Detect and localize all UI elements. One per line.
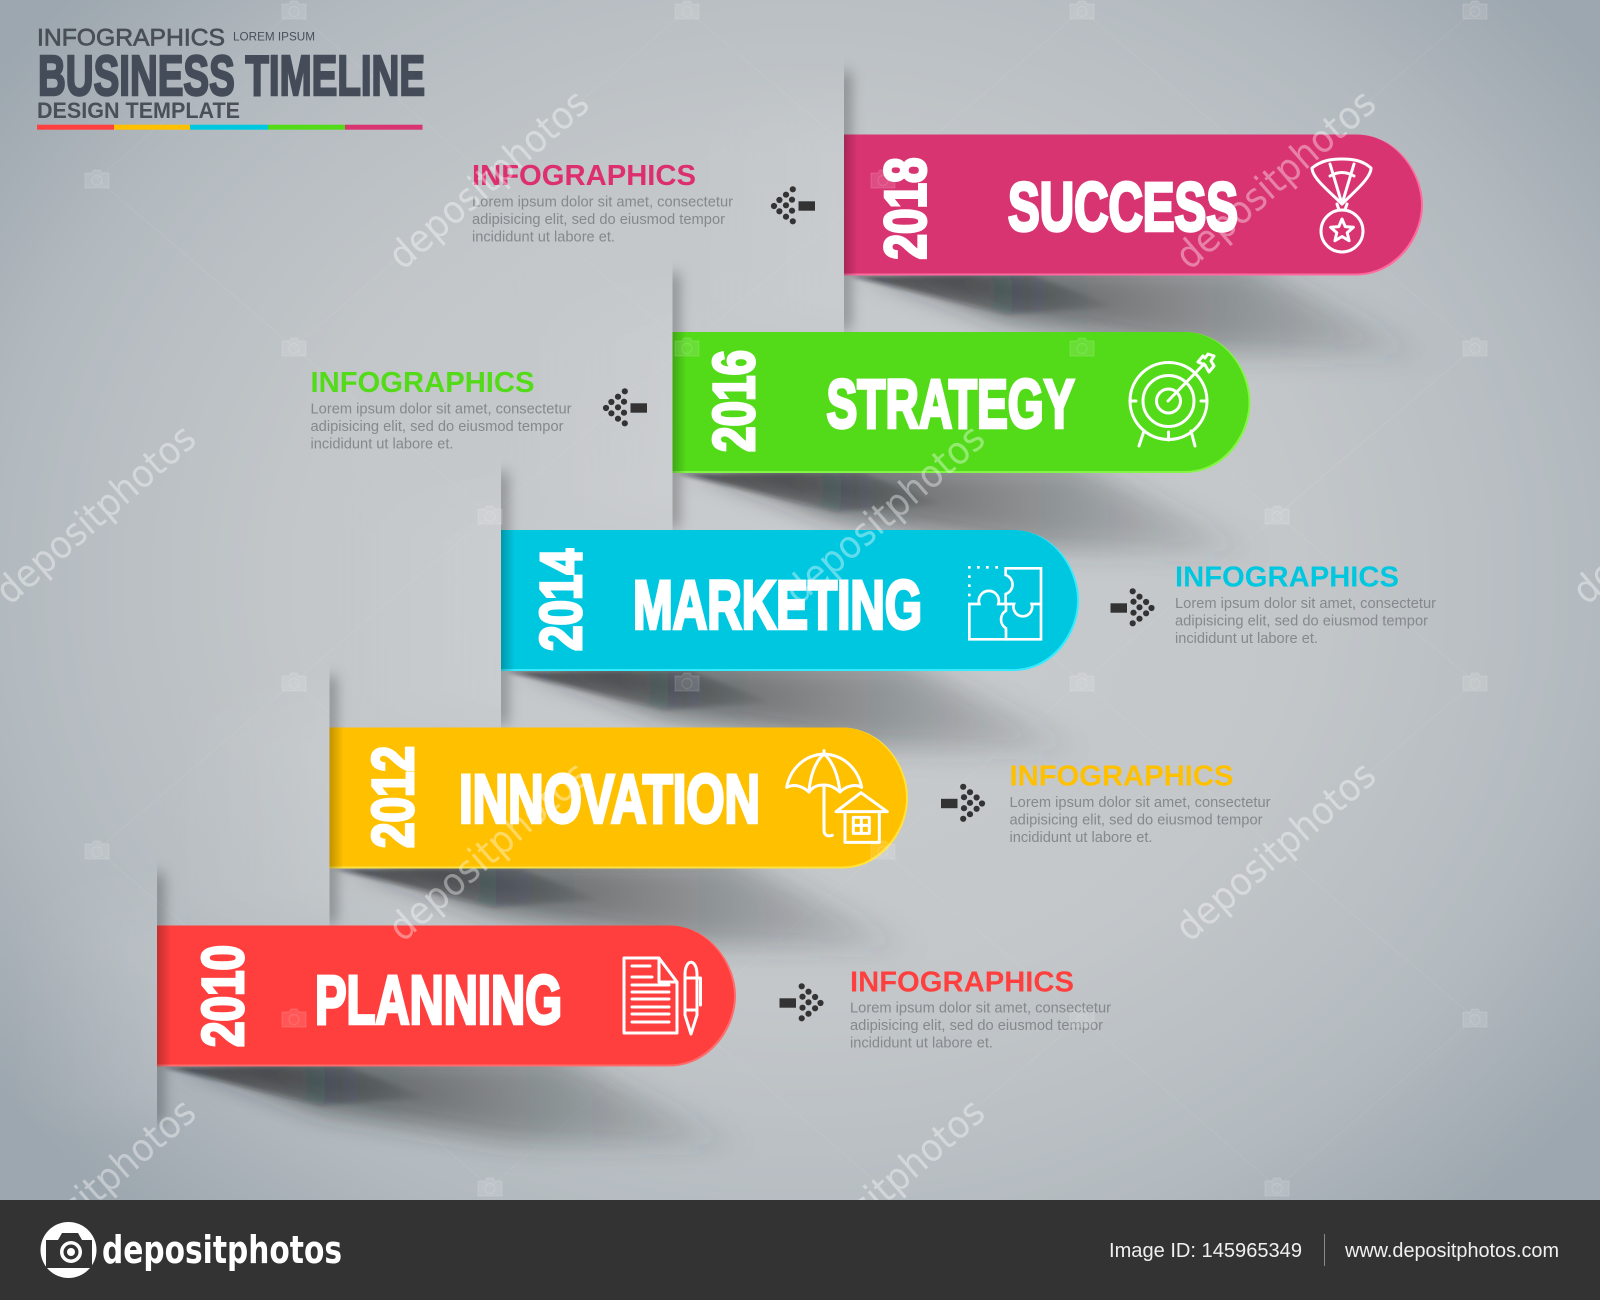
body text: Lorem ipsum dolor sit amet, consectetur [1010,795,1271,811]
title block: LOREM IPSUM [233,30,315,43]
body text: incididunt ut labore et. [472,229,615,245]
label: 2018 infographics [472,160,733,245]
label: 2016 infographics [310,367,572,452]
main heading: BUSINESS TIMELINE [38,44,425,108]
label: 2014 infographics [1175,562,1436,647]
shadow: 2010 band [162,1056,747,1148]
title block: INFOGRAPHICS [37,24,225,52]
band title: SUCCESS [1008,168,1238,246]
watermarks: depositphotos [1167,753,1384,950]
arrow: 2012 [941,784,985,822]
body text: incididunt ut labore et. [850,1035,993,1051]
body text: Lorem ipsum dolor sit amet, consectetur [1175,596,1436,612]
shadow: 2018 band [849,264,1434,356]
watermarks: depositphotos [776,416,993,613]
footer logo wordmark: depositphotos [102,1228,342,1272]
band title: INNOVATION [459,760,760,838]
icon: puzzle [968,566,1041,639]
band title: STRATEGY [826,366,1074,442]
arrow: 2018 [771,186,815,224]
shadow: 2012 band [334,858,920,950]
icon: target [1130,354,1214,446]
arrow: 2016 [603,388,647,426]
band: 2012 innovation [330,728,908,868]
body text: Lorem ipsum dolor sit amet, consectetur [472,194,733,210]
band: 2014 marketing [501,530,1079,671]
body text: adipisicing elit, sed do eiusmod tempor [472,212,725,228]
year: 2010 [191,945,256,1047]
step panel: 2010 slit [157,868,170,1128]
body text: incididunt ut labore et. [310,436,454,452]
icon: document and pen [624,958,700,1034]
body text: Lorem ipsum dolor sit amet, consectetur [850,1000,1111,1016]
label: 2010 infographics [850,966,1111,1051]
label: 2016 infographics: INFOGRAPHICS [310,367,534,399]
label: 2010 infographics: INFOGRAPHICS [850,966,1074,998]
step panel: 2012 slit [330,670,344,926]
band title: MARKETING [633,566,922,644]
year: 2016 [702,350,767,452]
body text: Lorem ipsum dolor sit amet, consectetur [310,402,572,418]
year: 2012 [361,746,426,848]
shadow: 2014 band [506,660,1091,752]
year: 2014 [529,549,594,651]
shadow: 2016 band [678,462,1262,554]
body text [1010,795,1271,846]
icon: umbrella and house [787,751,887,842]
subtitle: DESIGN TEMPLATE [37,98,240,123]
website: www.depositphotos.com [1344,1240,1559,1262]
arrow: 2010 [780,983,824,1021]
image id: Image ID: 145965349 [1109,1240,1302,1262]
body text: adipisicing elit, sed do eiusmod tempor [1010,812,1263,828]
watermarks: depositphotos [776,1090,993,1287]
body text [310,402,572,452]
label: 2018 infographics: INFOGRAPHICS [472,160,696,192]
label: 2012 infographics [1010,760,1271,846]
footer logo icon [40,1222,96,1278]
step panel: 2014 slit [501,466,515,728]
watermarks: depositphotos [380,753,597,950]
footer bar [0,1200,1600,1300]
band: 2010 planning [157,926,736,1066]
step panel: 2016 slit [672,267,686,530]
colour rule [37,125,422,130]
band: 2018 success [844,134,1423,276]
body text [1175,596,1436,647]
icon: medal [1312,159,1371,252]
band title: PLANNING [315,962,562,1038]
body text: incididunt ut labore et. [1175,631,1318,647]
body text: adipisicing elit, sed do eiusmod tempor [850,1018,1103,1034]
title block [37,24,425,130]
label: 2012 infographics: INFOGRAPHICS [1010,760,1234,792]
arrow: 2014 [1110,588,1155,626]
body text [850,1000,1111,1051]
body text [472,194,733,245]
watermarks: depositphotos [380,81,597,278]
watermarks: depositphotos [1167,81,1384,278]
band: 2016 strategy [672,332,1250,473]
year: 2018 [874,158,938,260]
step panel: 2018 slit [844,66,858,332]
label: 2014 infographics: INFOGRAPHICS [1175,562,1399,594]
body text: adipisicing elit, sed do eiusmod tempor [310,419,564,435]
body text: adipisicing elit, sed do eiusmod tempor [1175,614,1428,630]
body text: incididunt ut labore et. [1010,830,1152,846]
